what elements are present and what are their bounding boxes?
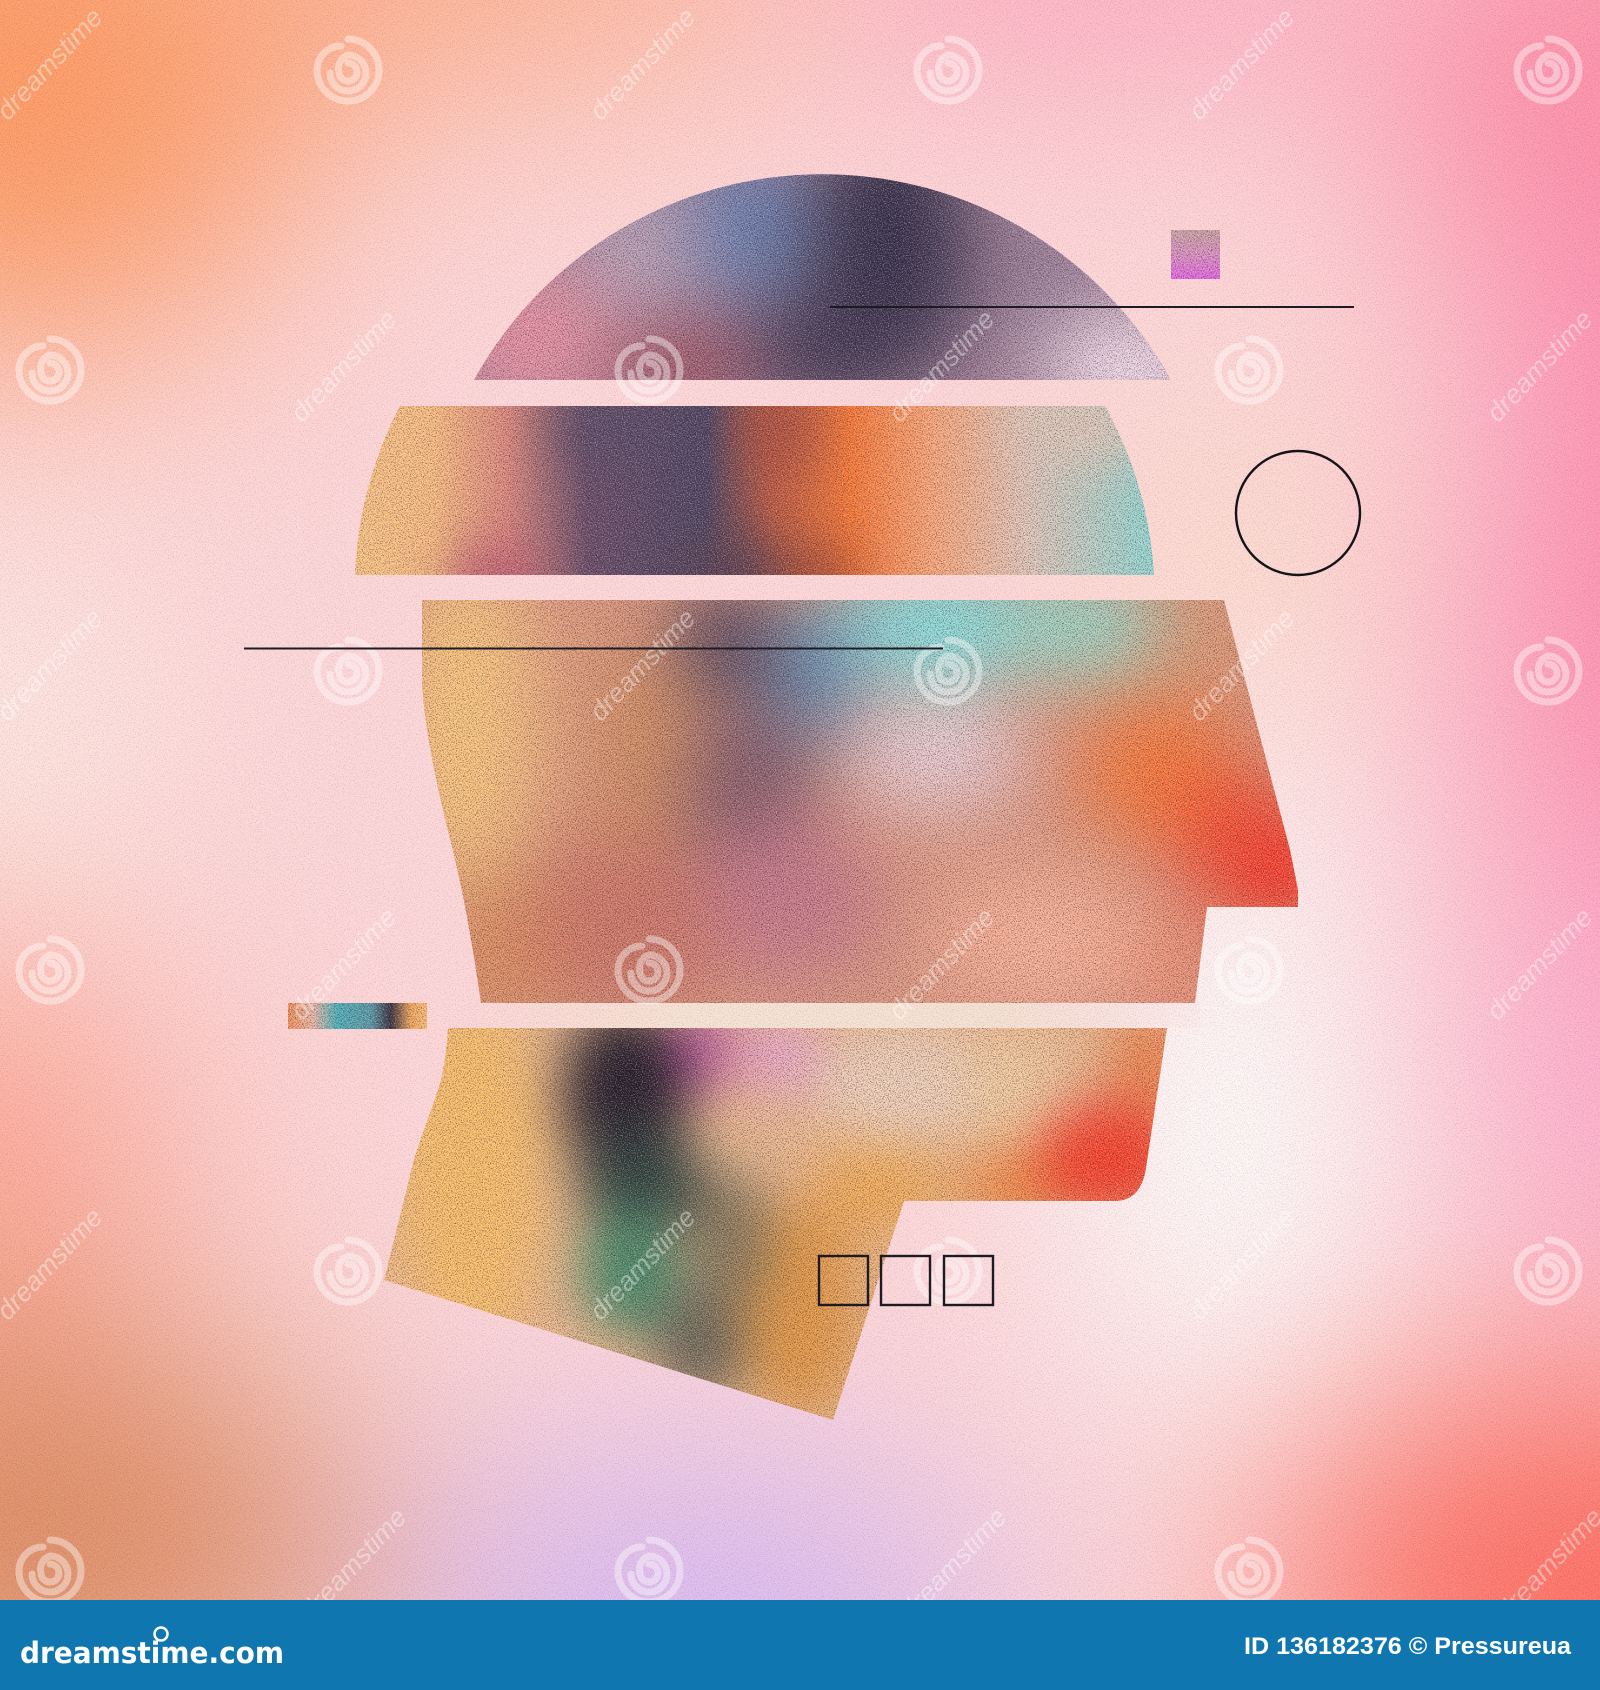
footer bar	[0, 1600, 1600, 1690]
watermark text: dreamstime	[882, 902, 1000, 1026]
three outlined squares	[819, 1256, 993, 1305]
watermark text: dreamstime	[284, 304, 402, 428]
watermark text: dreamstime	[1480, 902, 1598, 1026]
watermark text: dreamstime	[583, 2, 701, 126]
watermark text: dreamstime	[894, 1502, 1012, 1626]
watermark text: dreamstime	[583, 603, 701, 727]
footer credit: ID 136182376 © Pressureua	[1244, 1633, 1572, 1660]
small gradient square	[1171, 230, 1220, 279]
head slice: dome	[474, 174, 1171, 380]
head slice: face with nose	[422, 600, 1298, 1003]
watermark text: dreamstime	[583, 1202, 701, 1326]
footer logo: dreamstime.com	[20, 1636, 284, 1670]
upper horizontal line	[830, 306, 1354, 308]
watermark text: dreamstime	[1182, 603, 1300, 727]
middle horizontal line	[244, 648, 943, 650]
watermark text: dreamstime	[294, 1502, 412, 1626]
head slice: jaw and neck	[384, 1028, 1167, 1420]
outlined circle	[1236, 451, 1360, 575]
small gradient strip	[288, 1003, 427, 1029]
watermark text: dreamstime	[1182, 1202, 1300, 1326]
watermark text: dreamstime	[1480, 304, 1598, 428]
watermark text: dreamstime	[1182, 2, 1300, 126]
head slice: forehead band	[355, 406, 1154, 575]
watermark text: dreamstime	[882, 304, 1000, 428]
watermark text: dreamstime	[284, 902, 402, 1026]
